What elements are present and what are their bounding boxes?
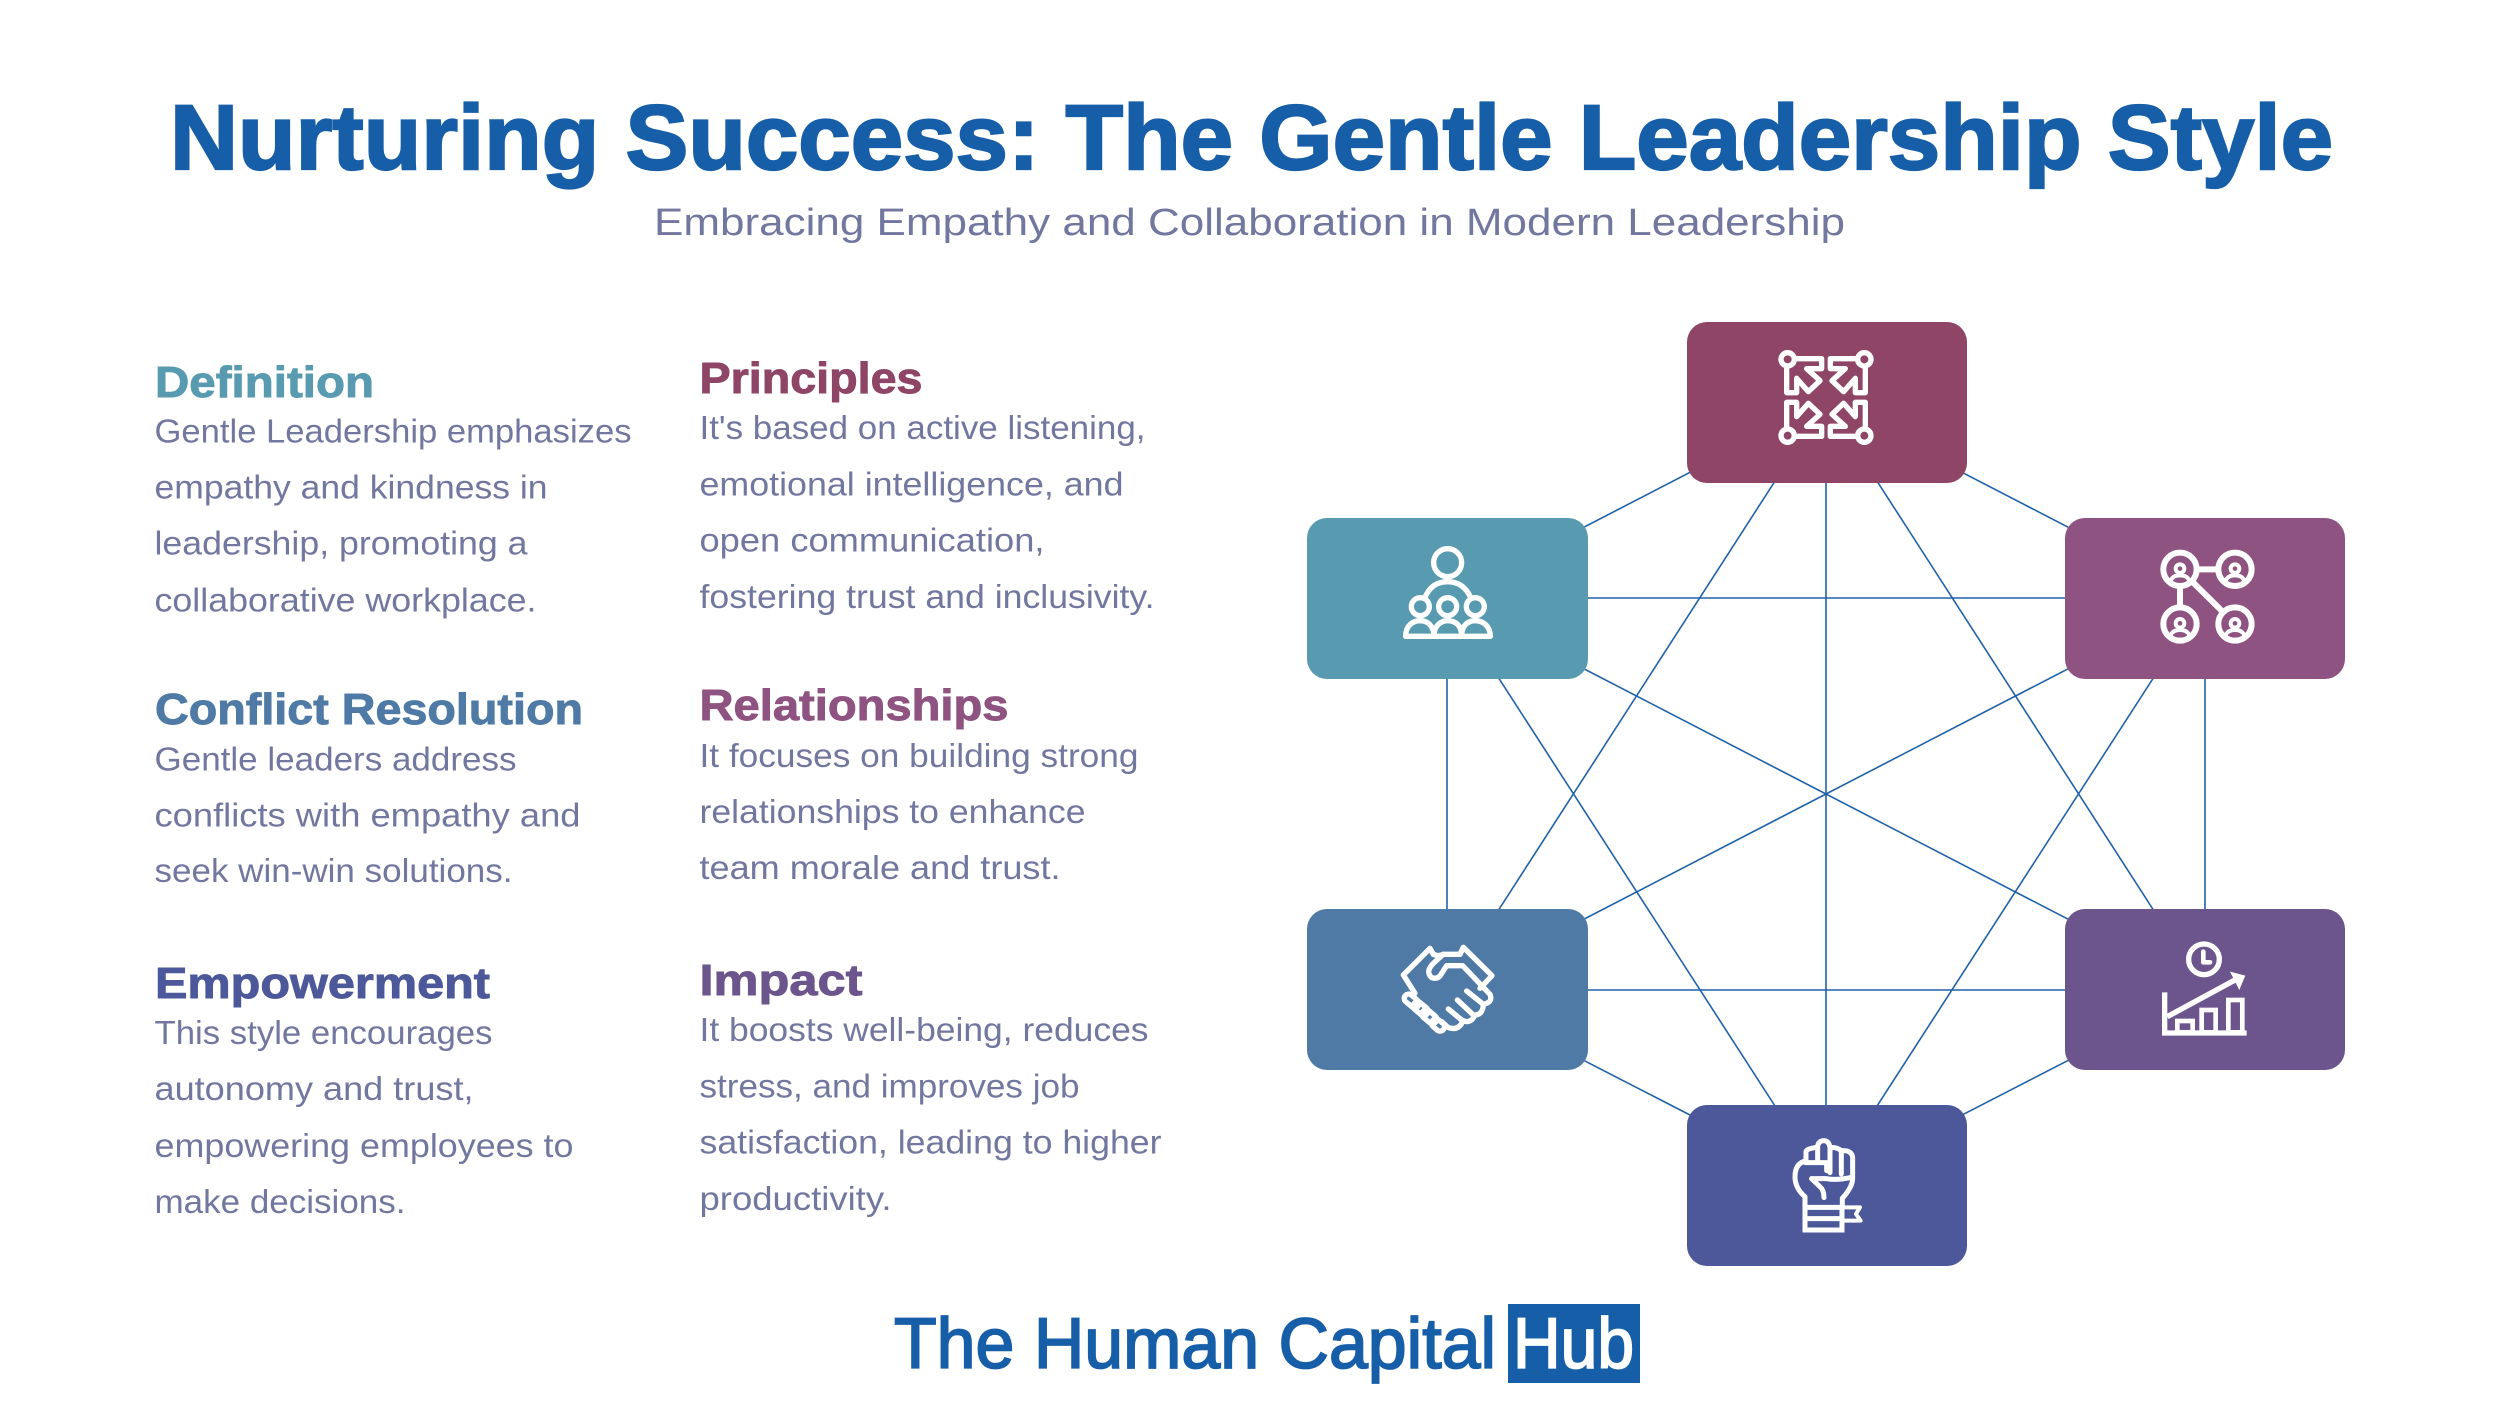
icon: handshake	[1402, 947, 1492, 1033]
text block: conflict resolution: conflicts with empathy and	[154, 796, 580, 834]
icon: four arrows	[1781, 353, 1871, 442]
text block: relationships	[700, 737, 1138, 886]
text block: empowerment	[154, 1014, 574, 1220]
text block: conflict resolution: seek win-win solutions.	[154, 852, 512, 889]
icon: connected people	[2163, 553, 2252, 641]
icon: growth chart with clock	[2165, 944, 2247, 1033]
text block: impact: satisfaction, leading to higher	[700, 1124, 1162, 1160]
text block: relationships: relationships to enhance	[700, 793, 1086, 830]
text block: empowerment: autonomy and trust,	[154, 1070, 474, 1107]
diagram: connected hexagon network	[1307, 322, 2345, 1266]
text block: impact	[700, 1011, 1162, 1217]
panel: empowerment	[154, 959, 574, 1220]
text block: definition: empathy and kindness in	[154, 468, 548, 506]
text block: conflict resolution: Gentle leaders address	[154, 740, 516, 778]
text block: principles: open communication,	[700, 522, 1044, 558]
heading: conflict resolution: Conflict Resolution	[155, 685, 583, 734]
text block: impact: It boosts well-being, reduces	[700, 1011, 1148, 1048]
text block: definition: Gentle Leadership emphasizes	[154, 412, 632, 450]
text block: empowerment: make decisions.	[154, 1183, 406, 1220]
node: impact (lower right)	[2065, 909, 2345, 1070]
icon: raised fist	[1795, 1141, 1861, 1230]
text block: empowerment: empowering employees to	[154, 1127, 574, 1164]
panel: relationships	[700, 681, 1138, 886]
panel: conflict resolution	[154, 685, 583, 889]
text block: conflict resolution	[154, 740, 580, 889]
logo badge: Hub: Hub	[1513, 1305, 1634, 1384]
node: relationships (upper right)	[2065, 518, 2345, 679]
node: principles (top)	[1687, 322, 1967, 483]
text block: principles: It's based on active listening,	[700, 409, 1146, 446]
node: conflict resolution (lower left)	[1307, 909, 1588, 1070]
heading: impact: Impact	[700, 956, 863, 1005]
text block: principles	[700, 409, 1154, 615]
text block: impact: stress, and improves job	[700, 1068, 1080, 1104]
panel: definition	[154, 358, 632, 618]
heading: relationships: Relationships	[700, 681, 1008, 730]
heading: definition: Definition	[155, 358, 374, 407]
text block: relationships: team morale and trust.	[700, 849, 1060, 886]
subtitle: Embracing Empathy and Collaboration in Modern Leadership	[654, 202, 1845, 244]
heading: principles: Principles	[700, 354, 922, 403]
text block: impact: productivity.	[700, 1180, 892, 1217]
text block: definition	[154, 412, 632, 618]
node: empowerment (bottom)	[1687, 1105, 1967, 1266]
icon: group of people	[1406, 549, 1490, 636]
text block: definition: collaborative workplace.	[154, 582, 536, 618]
text block: relationships: It focuses on building strong	[700, 737, 1138, 774]
node: definition (upper left)	[1307, 518, 1588, 679]
text block: definition: leadership, promoting a	[154, 524, 528, 562]
text block: principles: emotional intelligence, and	[700, 466, 1124, 502]
panel: principles	[700, 354, 1154, 615]
panel: impact	[700, 956, 1162, 1217]
title: Nurturing Success: The Gentle Leadership Style	[170, 87, 2333, 189]
logo wordmark: The Human Capital	[894, 1305, 1496, 1384]
logo: The Human Capital Hub	[894, 1304, 1640, 1384]
text block: principles: fostering trust and inclusivity.	[700, 578, 1154, 615]
text block: empowerment: This style encourages	[154, 1014, 492, 1051]
heading: empowerment: Empowerment	[155, 959, 490, 1008]
